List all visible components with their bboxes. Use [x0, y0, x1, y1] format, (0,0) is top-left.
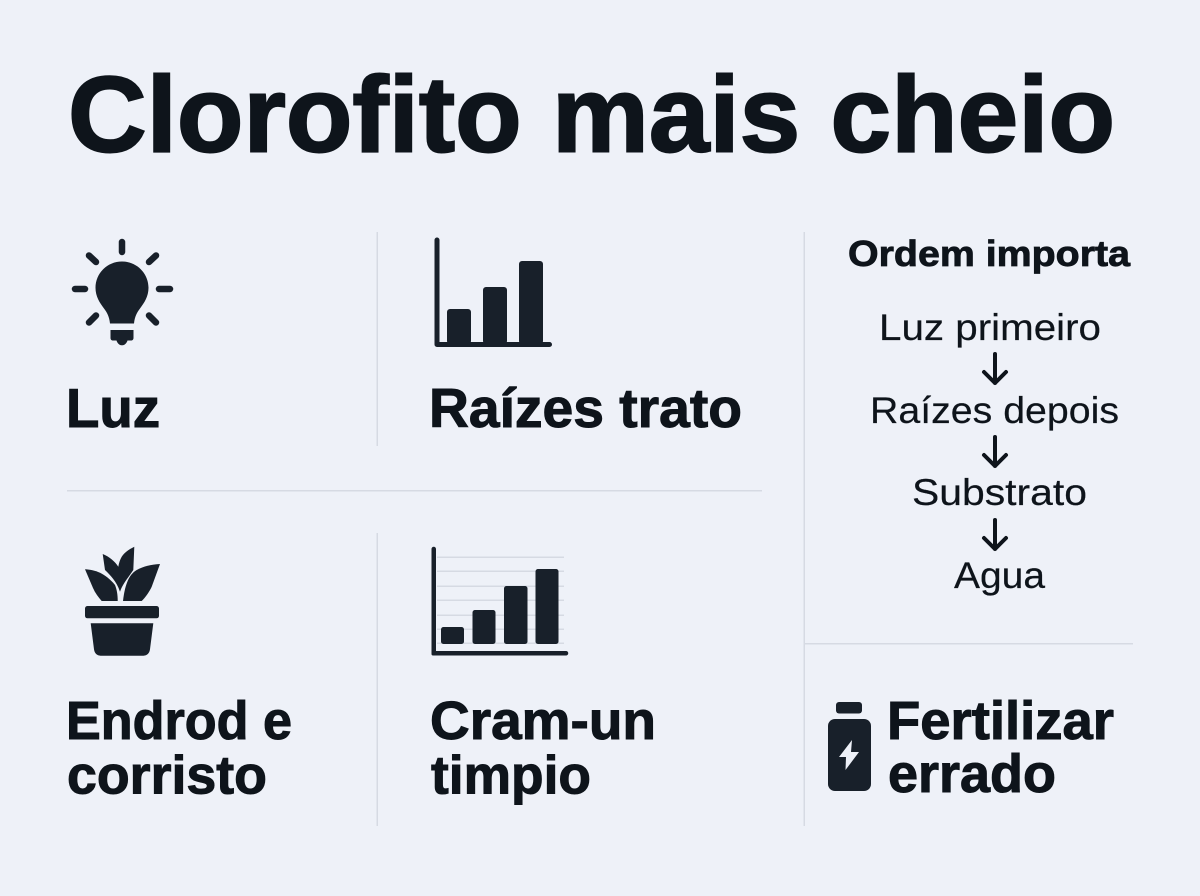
arrow 3	[984, 520, 1006, 549]
label: Fertilizar errado: errado	[888, 744, 1056, 804]
title: Clorofito mais cheio	[68, 54, 1115, 174]
label: Endrod e corristo: Endrod e	[66, 691, 292, 751]
label: Fertilizar errado: Fertilizar	[887, 691, 1114, 751]
icon: light bulb	[75, 242, 170, 345]
step: Substrato: Substrato	[912, 472, 1087, 513]
step: Agua: Agua	[954, 555, 1045, 596]
panel: luz	[66, 242, 170, 439]
panel: cram-un	[430, 547, 656, 806]
heading: Ordem importa: Ordem importa	[848, 233, 1131, 274]
label: Cram-un timpio	[430, 691, 656, 806]
label: Fertilizar errado	[887, 691, 1114, 804]
step: Raízes depois: Raízes depois	[870, 390, 1119, 431]
icon: bar chart	[434, 238, 552, 347]
label: Cram-un timpio: timpio	[431, 746, 591, 806]
icon: bar chart with grid	[432, 547, 568, 656]
panel: fertilizar errado	[828, 691, 1114, 804]
arrow 2	[984, 437, 1006, 466]
panel: raizes	[429, 238, 742, 439]
icon: fertilizer bottle	[828, 702, 871, 791]
arrow 1	[984, 354, 1006, 383]
label: Luz: Luz	[66, 377, 160, 439]
label: Cram-un timpio: Cram-un	[430, 691, 656, 751]
icon: potted plant	[85, 547, 160, 656]
panel: endrod	[66, 547, 292, 806]
label: Endrod e corristo	[66, 691, 292, 806]
label: Raízes trato: Raízes trato	[429, 377, 742, 439]
label: Endrod e corristo: corristo	[67, 746, 267, 806]
panel: ordem importa	[848, 233, 1131, 596]
step: Luz primeiro: Luz primeiro	[879, 307, 1101, 348]
